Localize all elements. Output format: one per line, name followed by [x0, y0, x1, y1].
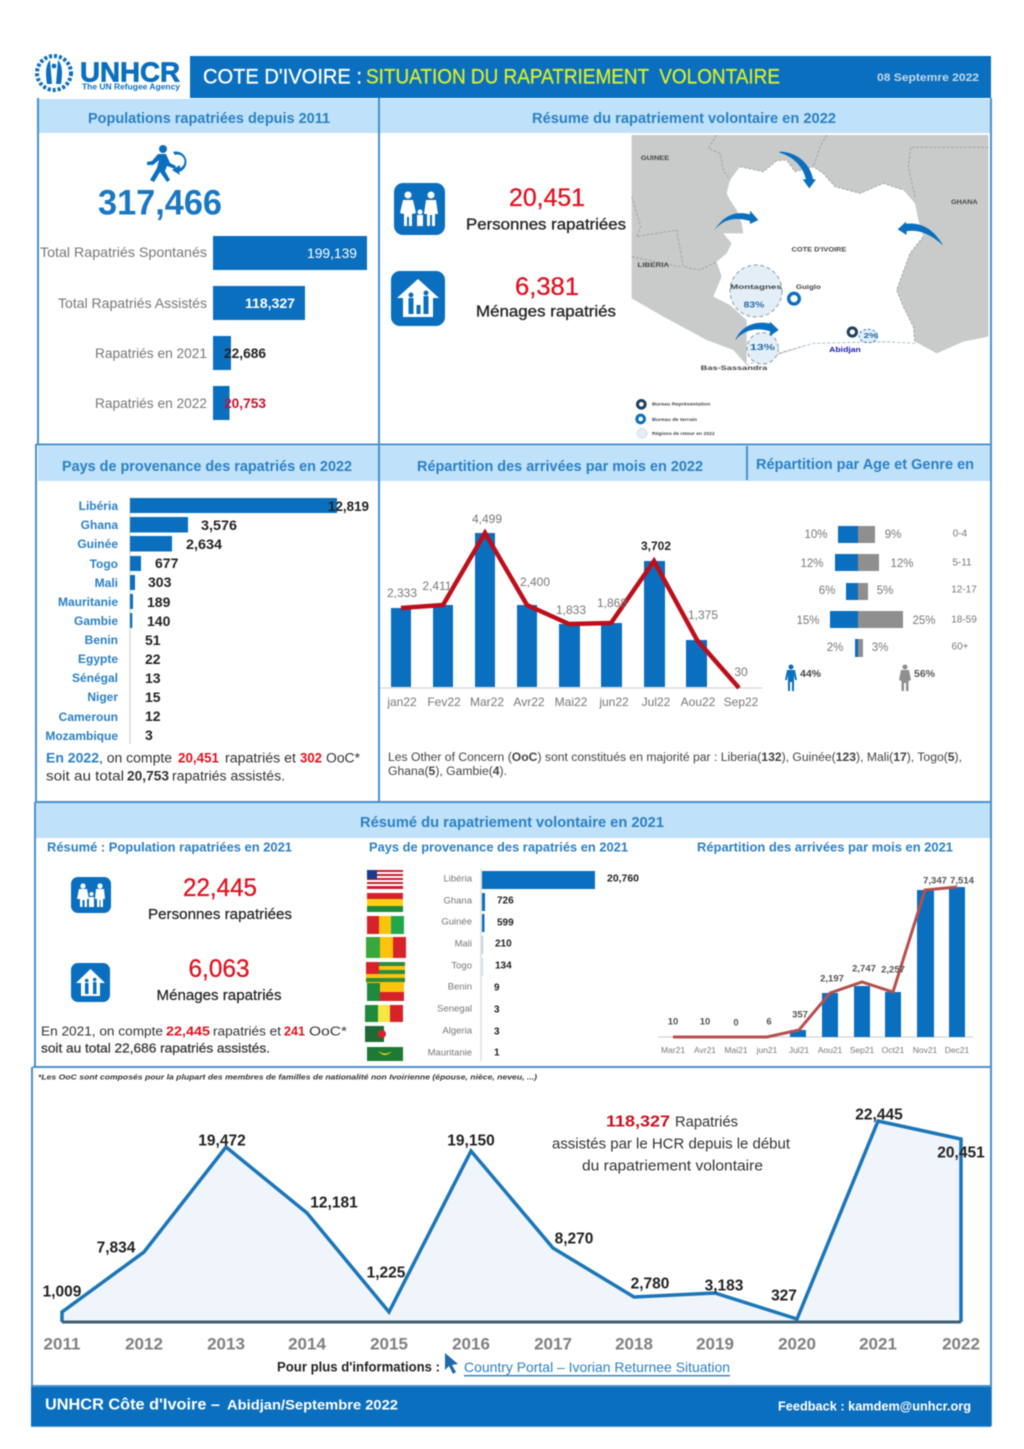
line chart: annual returns 2011-2022: 19,472	[198, 1132, 246, 1150]
combo chart: monthly arrivals 2021: 2,747	[852, 964, 876, 974]
bar chart: countries 2022: 677	[155, 555, 179, 571]
bar chart: countries 2021: Guinée	[441, 916, 472, 928]
icon: female 56%: 56%	[914, 668, 936, 680]
pyramid chart: age and gender: 6%	[819, 585, 835, 597]
bar chart: countries 2022: 140	[147, 613, 171, 629]
bar chart: countries 2022: 51	[145, 632, 161, 648]
icon: house 2021	[71, 963, 110, 1002]
stat: ménages 2021: 6,063	[188, 955, 250, 983]
combo chart: monthly arrivals 2022: Avr22	[513, 695, 545, 709]
combo chart: monthly arrivals 2021: jun21	[756, 1045, 778, 1055]
combo chart: monthly arrivals 2021: Dec21	[945, 1045, 970, 1055]
line chart: annual returns 2011-2022: 22,445	[855, 1106, 903, 1124]
line chart: annual returns 2011-2022: 2020	[778, 1334, 816, 1354]
text block: total 2022: soit au total	[46, 768, 124, 784]
panel: résumé 2022	[391, 111, 988, 438]
combo chart: monthly arrivals 2021: 7,514	[950, 876, 975, 886]
bar chart: countries 2021: Mali	[455, 938, 472, 950]
pyramid chart: age and gender	[796, 526, 977, 657]
bar chart: countries 2021: 3	[494, 1026, 500, 1038]
line chart: annual returns 2011-2022: 12,181	[310, 1194, 358, 1212]
combo chart: monthly arrivals 2021: Mar21	[661, 1045, 685, 1055]
bar chart: totals: 199,139	[307, 245, 357, 261]
bar chart: countries 2022: Sénégal	[72, 671, 118, 685]
map legend: Régions de retour en 2022	[652, 431, 715, 436]
footer: UNHCR Côte d'Ivoire –	[45, 1396, 220, 1414]
line chart: annual returns 2011-2022: 19,150	[447, 1132, 495, 1150]
callout: assisted returnees: assistés par le HCR depuis le début	[552, 1136, 791, 1152]
line chart: annual returns 2011-2022: 2,780	[631, 1276, 669, 1292]
map: Côte d'Ivoire	[632, 135, 988, 438]
bar chart: countries 2021: 3	[494, 1004, 500, 1016]
flag: Senegal	[365, 1005, 403, 1022]
line chart: annual returns 2011-2022: 2012	[125, 1334, 163, 1354]
flag: Mali	[366, 937, 406, 958]
combo chart: monthly arrivals 2021: Nov21	[913, 1045, 938, 1055]
combo chart: monthly arrivals 2021: Avr21	[694, 1045, 716, 1055]
icon: female 56%	[899, 664, 936, 691]
text block: total 2021: soit au total 22,686 rapatriés assistés.	[41, 1040, 270, 1056]
bar chart: countries 2022: 13	[145, 670, 161, 686]
text block: total 2022: rapatriés assistés.	[172, 768, 285, 784]
subheading: provenance 2021: Pays de provenance des rapatriés en 2021	[369, 840, 628, 854]
text block: total 2022	[46, 750, 361, 784]
pyramid chart: age and gender: 12%	[800, 558, 824, 570]
combo chart: monthly arrivals 2022: 3,702	[641, 539, 671, 553]
footnote: *Les OoC sont composés pour la plupart des membres de familles de nationalité non Ivoirienne (épouse, nièce, neveu, ...)	[38, 1074, 538, 1082]
heading: pays de provenance 2022: Pays de provenance des rapatriés en 2022	[62, 459, 352, 475]
bar chart: countries 2022: 3	[145, 727, 153, 743]
line chart: annual returns 2011-2022: 2019	[696, 1334, 734, 1354]
stat: personnes rapatriées	[466, 184, 626, 234]
pyramid chart: age and gender: 3%	[872, 642, 888, 654]
map labels: Abidjan	[829, 345, 861, 354]
combo chart: monthly arrivals 2021: Oct21	[882, 1045, 905, 1055]
map labels: GHANA	[951, 199, 978, 206]
bar chart: countries 2022: Mali	[95, 576, 118, 590]
bar chart: totals: 118,327	[245, 295, 295, 311]
combo chart: monthly arrivals 2022: jun22	[598, 695, 629, 709]
callout: assisted returnees	[552, 1114, 791, 1174]
callout: assisted returnees: 118,327	[606, 1114, 670, 1130]
map legend: Bureau Représentation	[652, 401, 711, 406]
combo chart: monthly arrivals 2022: 30	[734, 665, 748, 679]
text block: other of concern: Ghana(5), Gambie( 4).	[388, 766, 507, 778]
combo chart: monthly arrivals 2021: 357	[792, 1010, 808, 1020]
map labels: Montagnes	[730, 284, 782, 291]
map labels: LIBERIA	[637, 262, 669, 269]
line chart: annual returns 2011-2022	[43, 1106, 985, 1354]
text block: total 2022: rapatriés et	[225, 750, 296, 766]
pyramid chart: age and gender: 2%	[827, 642, 843, 654]
footer: Abidjan/Septembre 2022	[227, 1398, 398, 1412]
combo chart: monthly arrivals 2022: 1,868	[597, 596, 627, 610]
bar chart: totals: Total Rapatriés Assistés	[58, 295, 207, 311]
logo: UNHCR: UNHCR	[80, 56, 180, 88]
combo chart: monthly arrivals 2022: 2,333	[387, 586, 417, 600]
stat: ménages 2021	[156, 955, 282, 1004]
bar chart: countries 2022: 12	[145, 708, 161, 724]
text block: total 2022: 302	[300, 750, 322, 766]
text block: total 2021: 22,445	[166, 1024, 210, 1038]
bar chart: totals: 22,686	[224, 345, 266, 361]
pyramid chart: age and gender: 15%	[796, 615, 820, 627]
line chart: annual returns 2011-2022: 2011	[44, 1334, 80, 1354]
total figure: 317,466	[98, 184, 222, 222]
header banner: SITUATION DU RAPATRIEMENT VOLONTAIRE	[366, 66, 780, 88]
heading: répartition par mois 2022: Répartition des arrivées par mois en 2022	[417, 459, 703, 475]
map labels: GUINEE	[641, 155, 670, 162]
bar chart: countries 2021: 1	[494, 1048, 500, 1058]
bar chart: countries 2021: 9	[494, 982, 500, 994]
stat: ménages rapatriés: 6,381	[515, 273, 579, 301]
pyramid chart: age and gender: 0-4	[953, 528, 968, 540]
section bands	[36, 99, 990, 838]
bar chart: countries 2022: 303	[148, 574, 172, 590]
pyramid chart: age and gender: 12%	[890, 558, 914, 570]
combo chart: monthly arrivals 2021: 0	[733, 1018, 739, 1028]
panel: populations rapatriées depuis 2011	[40, 111, 367, 420]
bar chart: countries 2022: Mozambique	[45, 729, 118, 743]
line chart: annual returns 2011-2022: 8,270	[555, 1230, 593, 1248]
bar chart: countries 2022: Togo	[90, 557, 118, 571]
heading: age et genre: Répartition par Age et Genre en	[756, 457, 974, 473]
bar chart: countries 2021: 599	[497, 918, 514, 928]
bar chart: countries 2021: Senegal	[437, 1004, 472, 1014]
more information link: Country Portal – Ivorian Returnee Situation	[464, 1359, 730, 1375]
map labels: 13%	[750, 343, 775, 352]
subheading: population 2021: Résumé : Population rapatriées en 2021	[47, 840, 292, 854]
combo chart: monthly arrivals 2021: 2,257	[881, 964, 905, 976]
panel: répartition par mois 2022	[380, 459, 962, 778]
pyramid chart: age and gender: 10%	[804, 529, 828, 541]
combo chart: monthly arrivals 2021: Aou21	[818, 1045, 843, 1055]
combo chart: monthly arrivals 2021: 2,197	[820, 974, 844, 984]
icon: family	[394, 183, 445, 235]
map labels: 83%	[744, 299, 765, 309]
bar chart: countries 2022: 15	[145, 689, 161, 705]
map labels: COTE D'IVOIRE	[791, 246, 847, 253]
line chart: annual returns 2011-2022: 20,451	[937, 1144, 985, 1162]
stat: ménages rapatriés	[476, 273, 616, 320]
map labels: 2%	[864, 331, 878, 340]
bar chart: countries 2021: 210	[495, 938, 512, 950]
line chart: annual returns 2011-2022: 2014	[288, 1334, 326, 1354]
bar chart: countries 2022: Gambie	[74, 614, 118, 628]
bar chart: countries 2022: Mauritanie	[58, 595, 118, 609]
icon: male 44%: 44%	[800, 668, 822, 680]
stat: personnes 2021	[148, 874, 292, 923]
text block: total 2022: 20,753	[127, 768, 169, 784]
heading: résumé 2021: Résumé du rapatriement volontaire en 2021	[360, 815, 664, 831]
logo: UNHCR: The UN Refugee Agency	[82, 82, 181, 92]
pyramid chart: age and gender: 9%	[885, 529, 901, 541]
icon: family 2021	[71, 877, 111, 913]
line chart: annual returns 2011-2022: 3,183	[705, 1278, 744, 1294]
pyramid chart: age and gender: 18-59	[951, 614, 977, 626]
stat: ménages 2021: Ménages rapatriés	[156, 988, 282, 1004]
bar chart: countries 2021: 726	[497, 896, 514, 906]
bar chart: countries 2021: Libéria	[443, 874, 473, 884]
map labels	[637, 155, 978, 372]
footer	[31, 1387, 991, 1426]
line chart: annual returns 2011-2022: 2022	[942, 1334, 980, 1354]
flag: Benin	[367, 983, 404, 1001]
panel: pays de provenance 2022	[45, 459, 369, 784]
pyramid chart: age and gender: 5%	[877, 585, 893, 597]
bar chart: countries 2022: 189	[147, 594, 171, 610]
combo chart: monthly arrivals 2022	[380, 512, 762, 709]
stat: ménages rapatriés: Ménages rapatriés	[476, 304, 616, 320]
heading: populations: Populations rapatriées depuis 2011	[88, 111, 330, 127]
combo chart: monthly arrivals 2022: 1,833	[556, 603, 586, 617]
bar chart: countries 2022: Benin	[85, 633, 118, 647]
combo chart: monthly arrivals 2022: jan22	[386, 695, 417, 709]
combo chart: monthly arrivals 2022: Sep22	[724, 695, 759, 709]
callout: assisted returnees: Rapatriés	[675, 1114, 738, 1130]
more information link	[277, 1353, 730, 1375]
map legend: Bureau de terrain	[652, 417, 697, 422]
flags column	[365, 870, 406, 1061]
bar chart: countries 2021: Ghana	[443, 896, 473, 906]
pyramid chart: age and gender: 5-11	[952, 558, 972, 568]
text block: total 2021: OoC*	[309, 1024, 347, 1038]
text block: total 2021: 241	[284, 1024, 305, 1038]
pyramid chart: age and gender: 60+	[952, 642, 969, 652]
combo chart: monthly arrivals 2021	[658, 876, 975, 1055]
bar chart: countries 2022: Libéria	[79, 499, 118, 513]
bar chart: totals: Total Rapatriés Spontanés	[40, 244, 207, 260]
text block: other of concern	[388, 752, 962, 778]
bar chart: countries 2022	[45, 497, 369, 744]
panel: résumé 2021	[41, 815, 975, 1061]
callout: assisted returnees: du rapatriement volontaire	[582, 1158, 763, 1174]
bar chart: totals	[40, 236, 367, 420]
combo chart: monthly arrivals 2021: Jul21	[789, 1045, 809, 1055]
heading: résumé 2022: Résume du rapatriement volontaire en 2022	[532, 111, 836, 127]
combo chart: monthly arrivals 2021: 10	[700, 1016, 710, 1028]
bar chart: countries 2022: Niger	[87, 690, 118, 704]
header banner: COTE D'IVOIRE :	[203, 66, 362, 88]
flag: Guinea	[367, 916, 404, 934]
bar chart: totals: Rapatriés en 2021	[95, 345, 207, 361]
map labels: Bas-Sassandra	[701, 365, 768, 372]
combo chart: monthly arrivals 2022: Aou22	[681, 695, 716, 709]
map labels: Guiglo	[796, 284, 821, 291]
combo chart: monthly arrivals 2022: 4,499	[472, 512, 502, 526]
bar chart: totals: Rapatriés en 2022	[95, 395, 207, 411]
bar chart: countries 2021: 20,760	[607, 874, 639, 884]
arrows	[714, 152, 943, 341]
combo chart: monthly arrivals 2021: Sep21	[850, 1045, 875, 1055]
icon: cursor	[445, 1353, 458, 1374]
icon: house	[391, 271, 445, 326]
combo chart: monthly arrivals 2022: Jul22	[642, 695, 671, 709]
combo chart: monthly arrivals 2021: 6	[766, 1016, 772, 1028]
combo chart: monthly arrivals 2022: Fev22	[427, 695, 461, 709]
line chart: annual returns 2011-2022: 7,834	[97, 1240, 136, 1256]
bar chart: countries 2022: 12,819	[328, 498, 369, 514]
bar chart: countries 2022: Egypte	[78, 652, 118, 666]
combo chart: monthly arrivals 2022: Mai22	[555, 695, 588, 709]
text block: total 2021: rapatriés et	[213, 1024, 281, 1038]
flag: Algeria	[365, 1026, 387, 1042]
text block: total 2021: En 2021, on compte	[41, 1024, 163, 1038]
stat: personnes rapatriées: Personnes rapatriées	[466, 216, 626, 234]
bar chart: countries 2022: Ghana	[81, 518, 118, 532]
text block: total 2022: OoC*	[326, 750, 361, 766]
text block: total 2022: 20,451	[178, 750, 219, 766]
text block: total 2022: En 2022	[46, 750, 99, 766]
combo chart: monthly arrivals 2021: Mai21	[724, 1045, 748, 1055]
subheading: arrivals 2021: Répartition des arrivées par mois en 2021	[697, 840, 953, 854]
combo chart: monthly arrivals 2022: 1,375	[688, 608, 718, 622]
bar chart: countries 2021	[428, 869, 639, 1061]
pyramid chart: age and gender: 25%	[912, 615, 936, 627]
footer: Feedback : kamdem@unhcr.org	[778, 1398, 971, 1414]
flag: Liberia	[367, 870, 403, 889]
line chart: annual returns 2011-2022: 2018	[615, 1334, 653, 1354]
bar chart: countries 2021: Togo	[451, 960, 472, 972]
text block: total 2022: , on compte	[99, 750, 172, 766]
line chart: annual returns 2011-2022: 2017	[534, 1334, 572, 1354]
header banner	[190, 56, 991, 98]
line chart: annual returns 2011-2022: 2013	[207, 1334, 245, 1354]
flag: Mauritania	[367, 1047, 403, 1061]
bar chart: countries 2022: 2,634	[186, 536, 222, 552]
bar chart: countries 2022: 22	[145, 651, 161, 667]
combo chart: monthly arrivals 2022: Mar22	[470, 695, 504, 709]
flag: Togo	[366, 962, 405, 983]
line chart: annual returns 2011-2022: 1,009	[43, 1284, 82, 1300]
combo chart: monthly arrivals 2021: 7,347	[923, 876, 947, 886]
bar chart: countries 2021: Benin	[448, 982, 472, 992]
combo chart: monthly arrivals 2022: 2,411	[422, 579, 452, 593]
more information link: Pour plus d'informations :	[277, 1360, 440, 1374]
line chart: annual returns 2011-2022: 1,225	[367, 1264, 406, 1282]
panel: age et genre	[756, 457, 977, 691]
line chart: annual returns 2011-2022: 2015	[370, 1334, 408, 1354]
bar chart: countries 2022: Guinée	[77, 537, 118, 551]
bar chart: countries 2021: Mauritanie	[428, 1048, 472, 1058]
map legend	[635, 399, 715, 438]
bar chart: countries 2021: Algeria	[442, 1026, 473, 1036]
icon: male 44%	[785, 664, 822, 691]
office icons	[787, 292, 858, 338]
combo chart: monthly arrivals 2021: 10	[668, 1016, 678, 1028]
stat: personnes rapatriées: 20,451	[509, 184, 585, 212]
pyramid chart: age and gender: 12-17	[951, 584, 977, 596]
stat: personnes 2021: Personnes rapatriées	[148, 907, 292, 923]
icon: walking returnee	[147, 145, 186, 182]
logo: UNHCR	[37, 56, 181, 92]
bar chart: countries 2021: 134	[495, 960, 512, 972]
bar chart: totals: 20,753	[224, 395, 266, 411]
line chart: annual returns 2011-2022: 2021	[859, 1334, 897, 1354]
combo chart: monthly arrivals 2022: 2,400	[520, 575, 550, 589]
bar chart: countries 2022: 3,576	[201, 517, 237, 533]
flag: Ghana	[367, 893, 403, 912]
text block: total 2021	[41, 1024, 347, 1056]
line chart: annual returns 2011-2022: 2016	[452, 1334, 490, 1354]
text block: other of concern: Les Other of Concern ( OoC) sont constitués en majorité par : Liberia( 132), Guinée( 123), Mali(17), Togo(5),	[388, 752, 962, 764]
bar chart: countries 2022: Cameroun	[59, 710, 118, 724]
region bubbles	[730, 265, 878, 364]
header banner: 08 Septemre 2022	[877, 72, 979, 84]
stat: personnes 2021: 22,445	[183, 874, 257, 902]
line chart: annual returns 2011-2022: 327	[771, 1288, 797, 1304]
